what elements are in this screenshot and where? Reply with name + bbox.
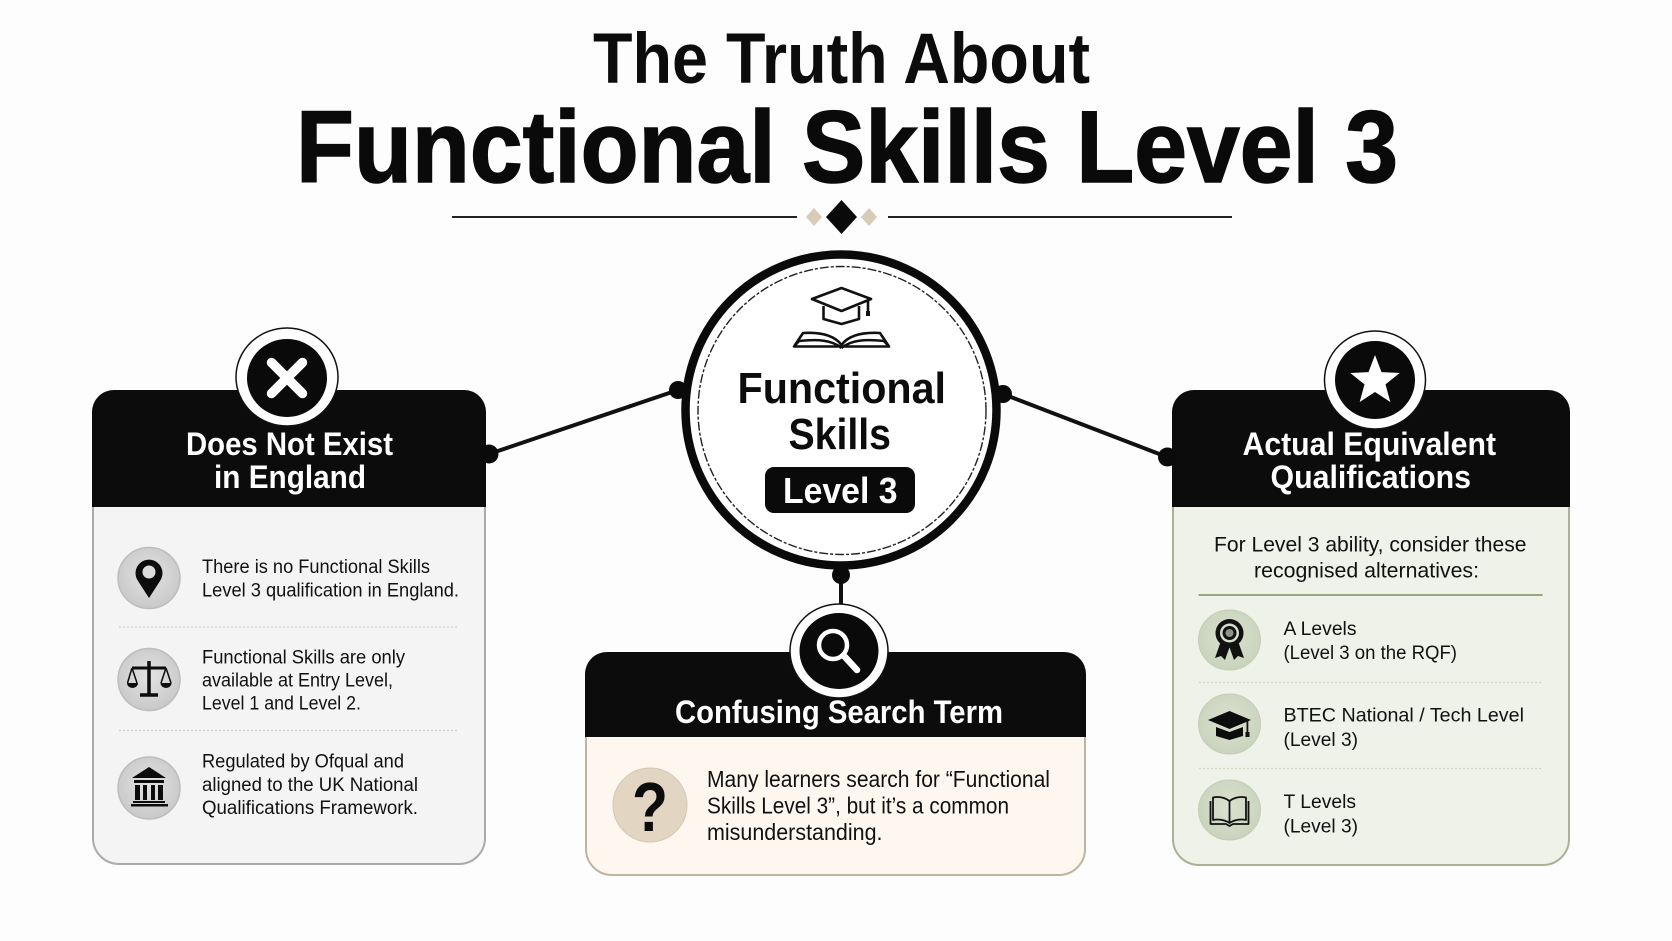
text: misunderstanding: misunderstanding. [707,819,882,845]
text: misunderstanding: Skills Level 3”, but it’s a common [707,792,1009,818]
panel heading [186,426,393,495]
text: misunderstanding [707,766,1050,845]
text: misunderstanding: Many learners search for “Functional [707,766,1050,792]
text: regulation: aligned to the UK National [202,775,418,796]
text: A Levels: A Levels [1284,619,1356,640]
panel heading: Qualifications [1270,459,1471,495]
text: availability: Level 1 and Level 2. [202,694,361,714]
text: regulation [202,752,418,819]
connector: centre to bottom panel [832,566,850,610]
title: Functional Skills Level 3 [296,90,1398,204]
text: T Levels: T Levels [1284,792,1356,813]
text: availability: available at Entry Level, [202,670,393,692]
intro text: For Level 3 ability, consider these [1214,534,1526,556]
intro text [1214,534,1526,582]
text: no level 3 [202,557,459,602]
text: no level 3: There is no Functional Skills [202,557,430,578]
icon: graduation cap and book [794,288,889,348]
icon: question mark: ? [632,768,668,846]
text: regulation: Qualifications Framework. [202,798,418,819]
text: availability [202,648,405,714]
icon: location pin [118,548,180,608]
panel header [585,652,1086,737]
icon: question mark [613,768,687,846]
panel heading: Does Not Exist [186,426,393,462]
text: T Levels [1284,792,1358,838]
text: availability: Functional Skills are only [202,648,405,668]
panel heading [1242,426,1496,495]
hub heading: Skills [788,410,891,459]
panel heading: Actual Equivalent [1242,426,1496,462]
hub heading: Functional [738,364,946,413]
text: BTEC: BTEC National / Tech Level [1284,706,1524,726]
panel: confusing search term [585,604,1086,875]
icon: star badge [1324,331,1426,429]
panel heading: in England [214,459,366,495]
icon: open book [1198,780,1260,840]
title divider ornament [452,200,1232,234]
icon: graduation cap [1198,694,1260,754]
icon: institution building [118,757,180,819]
panel: actual equivalent qualifications [1158,331,1570,865]
text: regulation: Regulated by Ofqual and [202,752,404,772]
hub level pill: Level 3 [783,470,898,511]
connector dot [480,444,498,464]
title [296,20,1398,204]
connector dot [1158,448,1177,466]
icon: magnifier badge [790,604,888,698]
text: BTEC [1284,706,1524,751]
panel header [92,390,486,507]
connector: centre to left panel [489,381,687,454]
text: T Levels: (Level 3) [1284,816,1358,838]
icon: scales [118,648,180,710]
text: A Levels: (Level 3 on the RQF) [1284,643,1457,664]
central hub circle [686,254,996,566]
icon: rosette award [1198,610,1260,670]
panel: does not exist in England [92,328,498,864]
connector: centre to right panel [994,385,1167,457]
hub heading [738,364,946,459]
title: The Truth About [593,20,1090,99]
text: A Levels [1284,619,1457,664]
panel heading: Confusing Search Term [675,694,1003,730]
text: no level 3: Level 3 qualification in England. [202,580,459,602]
intro text: recognised alternatives: [1254,560,1479,582]
text: BTEC: (Level 3) [1284,730,1358,751]
panel header [1172,390,1570,507]
icon: cross badge [236,328,338,426]
